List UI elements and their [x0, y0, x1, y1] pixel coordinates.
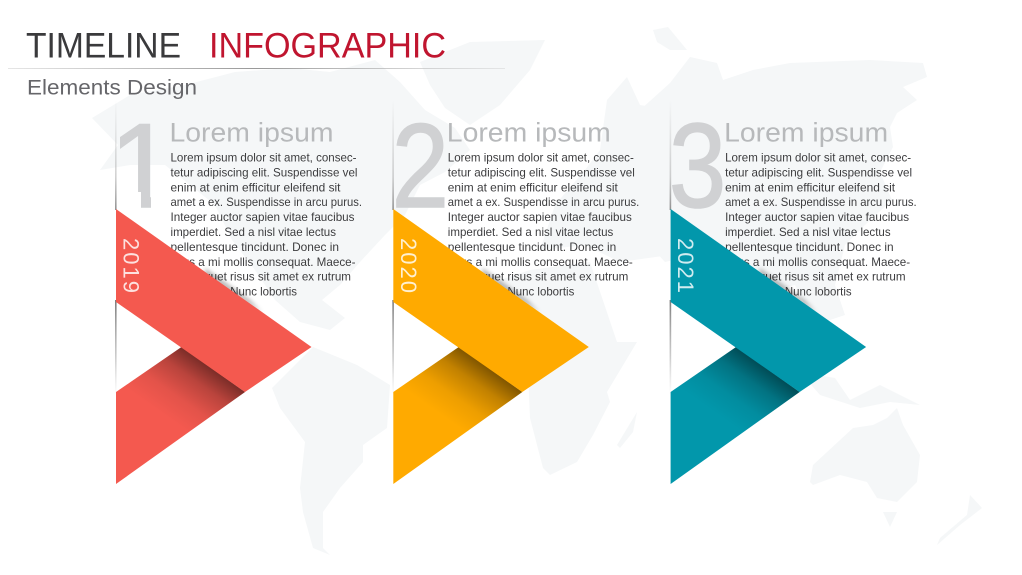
numeral 1: 1 [109, 99, 175, 233]
panel: step 1, 2019 [109, 99, 362, 484]
world map background [92, 27, 982, 555]
map: Madagascar [617, 412, 637, 448]
title: TIMELINE [26, 26, 181, 66]
map: Africa [482, 262, 637, 475]
panel: step 3, 2021 [669, 99, 917, 484]
text block 3: Integer auctor sapien vitae faucibus [725, 211, 909, 224]
text block 3: pellentesque tincidunt. Donec in [725, 241, 894, 254]
heading 3: Lorem ipsum [724, 118, 888, 148]
title: INFOGRAPHIC [209, 26, 446, 66]
subtitle: Elements Design [27, 76, 197, 100]
text block 3: imperdiet. Sed a nisl vitae lectus [725, 226, 891, 239]
text block 2: amet a ex. Suspendisse in arcu purus. [448, 196, 639, 209]
text block 2: nas aliquet risus sit amet ex rutrum [448, 271, 628, 284]
map: Greenland [420, 40, 545, 125]
text block 2: Integer auctor sapien vitae faucibus [448, 211, 632, 224]
map: New Zealand [937, 495, 982, 545]
text block 1: Lorem ipsum dolor sit amet, consec- [170, 152, 357, 164]
text block 1: amet dolor. Nunc lobortis [170, 286, 297, 299]
text block 1: amet a ex. Suspendisse in arcu purus. [170, 196, 362, 209]
panel: step 2, 2020 [392, 99, 639, 484]
heading 2: Lorem ipsum [447, 118, 611, 148]
text block 3: tetur adipiscing elit. Suspendisse vel [725, 166, 912, 179]
map: Australia [810, 408, 920, 502]
heading 1: Lorem ipsum [170, 118, 334, 148]
map: North America [92, 60, 470, 330]
text block 1: enim at enim efficitur eleifend sit [170, 181, 341, 194]
map: Asia [640, 57, 927, 325]
title [26, 26, 446, 66]
map: South America [272, 347, 390, 555]
year label 2021: 2021 [673, 238, 698, 293]
text block 2: enim at enim efficitur eleifend sit [448, 181, 619, 194]
numeral 3: 3 [669, 99, 726, 233]
text block 3: amet a ex. Suspendisse in arcu purus. [725, 196, 917, 209]
text block 1: Integer auctor sapien vitae faucibus [170, 211, 355, 224]
text block 2: imperdiet. Sed a nisl vitae lectus [448, 226, 613, 239]
text block 2: pellentesque tincidunt. Donec in [448, 241, 616, 254]
text block 3: enim at enim efficitur eleifend sit [725, 181, 896, 194]
arrow 2 [393, 209, 589, 484]
text block 1: imperdiet. Sed a nisl vitae lectus [170, 226, 336, 239]
text block 1 [170, 152, 362, 299]
arrow 1 [116, 209, 312, 484]
text block 3: amet dolor. Nunc lobortis [725, 286, 852, 299]
text block 3: nas aliquet risus sit amet ex rutrum [725, 271, 906, 284]
numeral 2: 2 [392, 99, 449, 233]
text block 1: nas aliquet risus sit amet ex rutrum [170, 271, 351, 284]
text block 1: risus a mi mollis consequat. Maece- [170, 256, 356, 269]
map: Europe [540, 77, 670, 262]
year label 2019: 2019 [118, 238, 144, 293]
text block 2 [448, 152, 639, 299]
map: Indonesia and New Guinea [800, 372, 920, 408]
year label 2020: 2020 [396, 238, 421, 293]
text block 1: tetur adipiscing elit. Suspendisse vel [170, 166, 358, 179]
text block 1: pellentesque tincidunt. Donec in [170, 241, 339, 254]
text block 3: risus a mi mollis consequat. Maece- [725, 256, 910, 269]
map: Tasmania [883, 512, 897, 527]
arrow 3 [671, 209, 866, 484]
text block 3: Lorem ipsum dolor sit amet, consec- [725, 152, 911, 164]
text block 2: tetur adipiscing elit. Suspendisse vel [448, 166, 635, 179]
text block 2: Lorem ipsum dolor sit amet, consec- [448, 152, 634, 164]
text block 2: risus a mi mollis consequat. Maece- [448, 256, 633, 269]
text block 2: amet dolor. Nunc lobortis [448, 286, 574, 299]
map: Arctic islands [653, 27, 687, 50]
text block 3 [725, 152, 917, 299]
